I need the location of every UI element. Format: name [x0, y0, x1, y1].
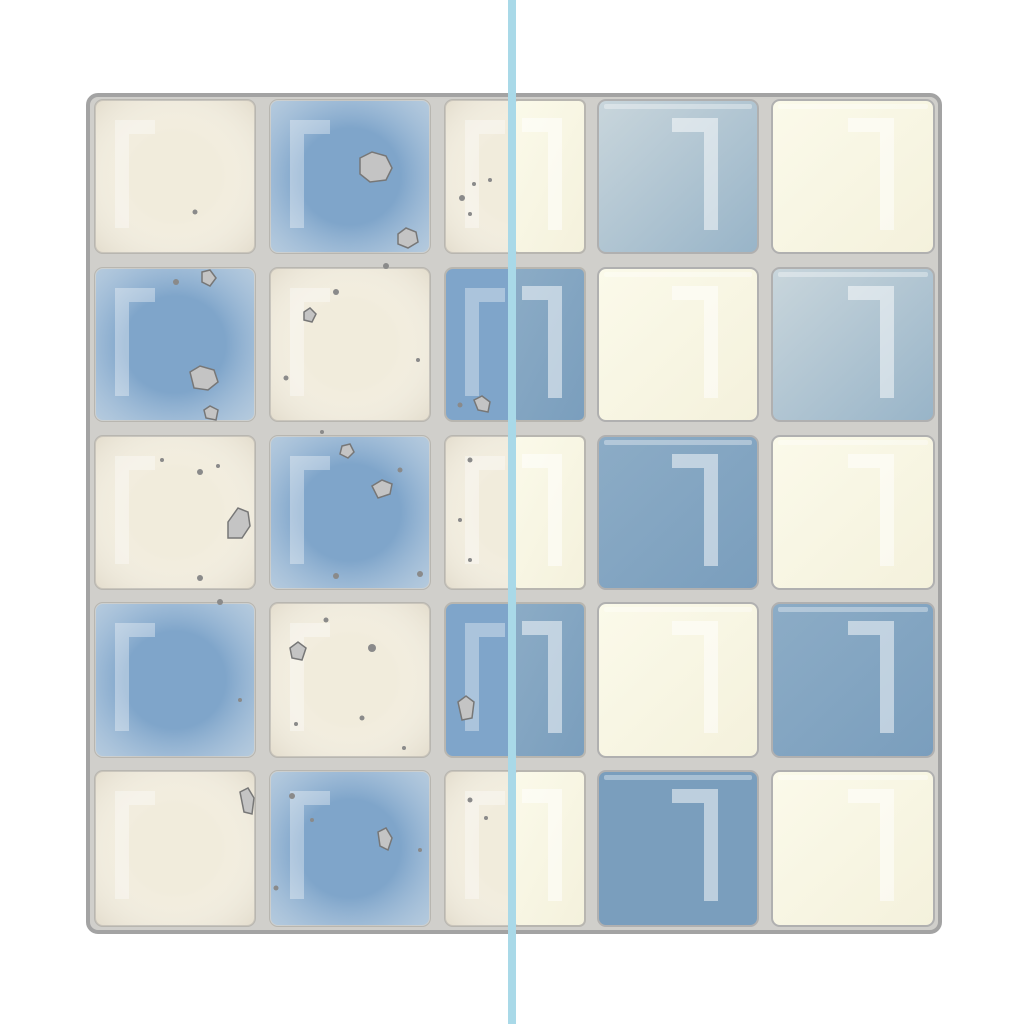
highlights left (L at top-left): [115, 120, 505, 899]
panel: clean tiles (right): [512, 100, 934, 926]
row 1: [95, 268, 255, 421]
panel: dirty tiles (left): [95, 100, 585, 926]
highlights right (L at top-right): [522, 118, 894, 901]
row 4: [95, 771, 255, 926]
grime spots: [190, 152, 490, 850]
row 0: [95, 100, 255, 253]
gloss top edges: [604, 104, 928, 780]
grout frame: [88, 95, 940, 932]
divider line: before/after: [508, 0, 516, 1024]
row 2: [95, 436, 255, 589]
grime haze: [95, 100, 585, 926]
row 3: [95, 603, 255, 757]
